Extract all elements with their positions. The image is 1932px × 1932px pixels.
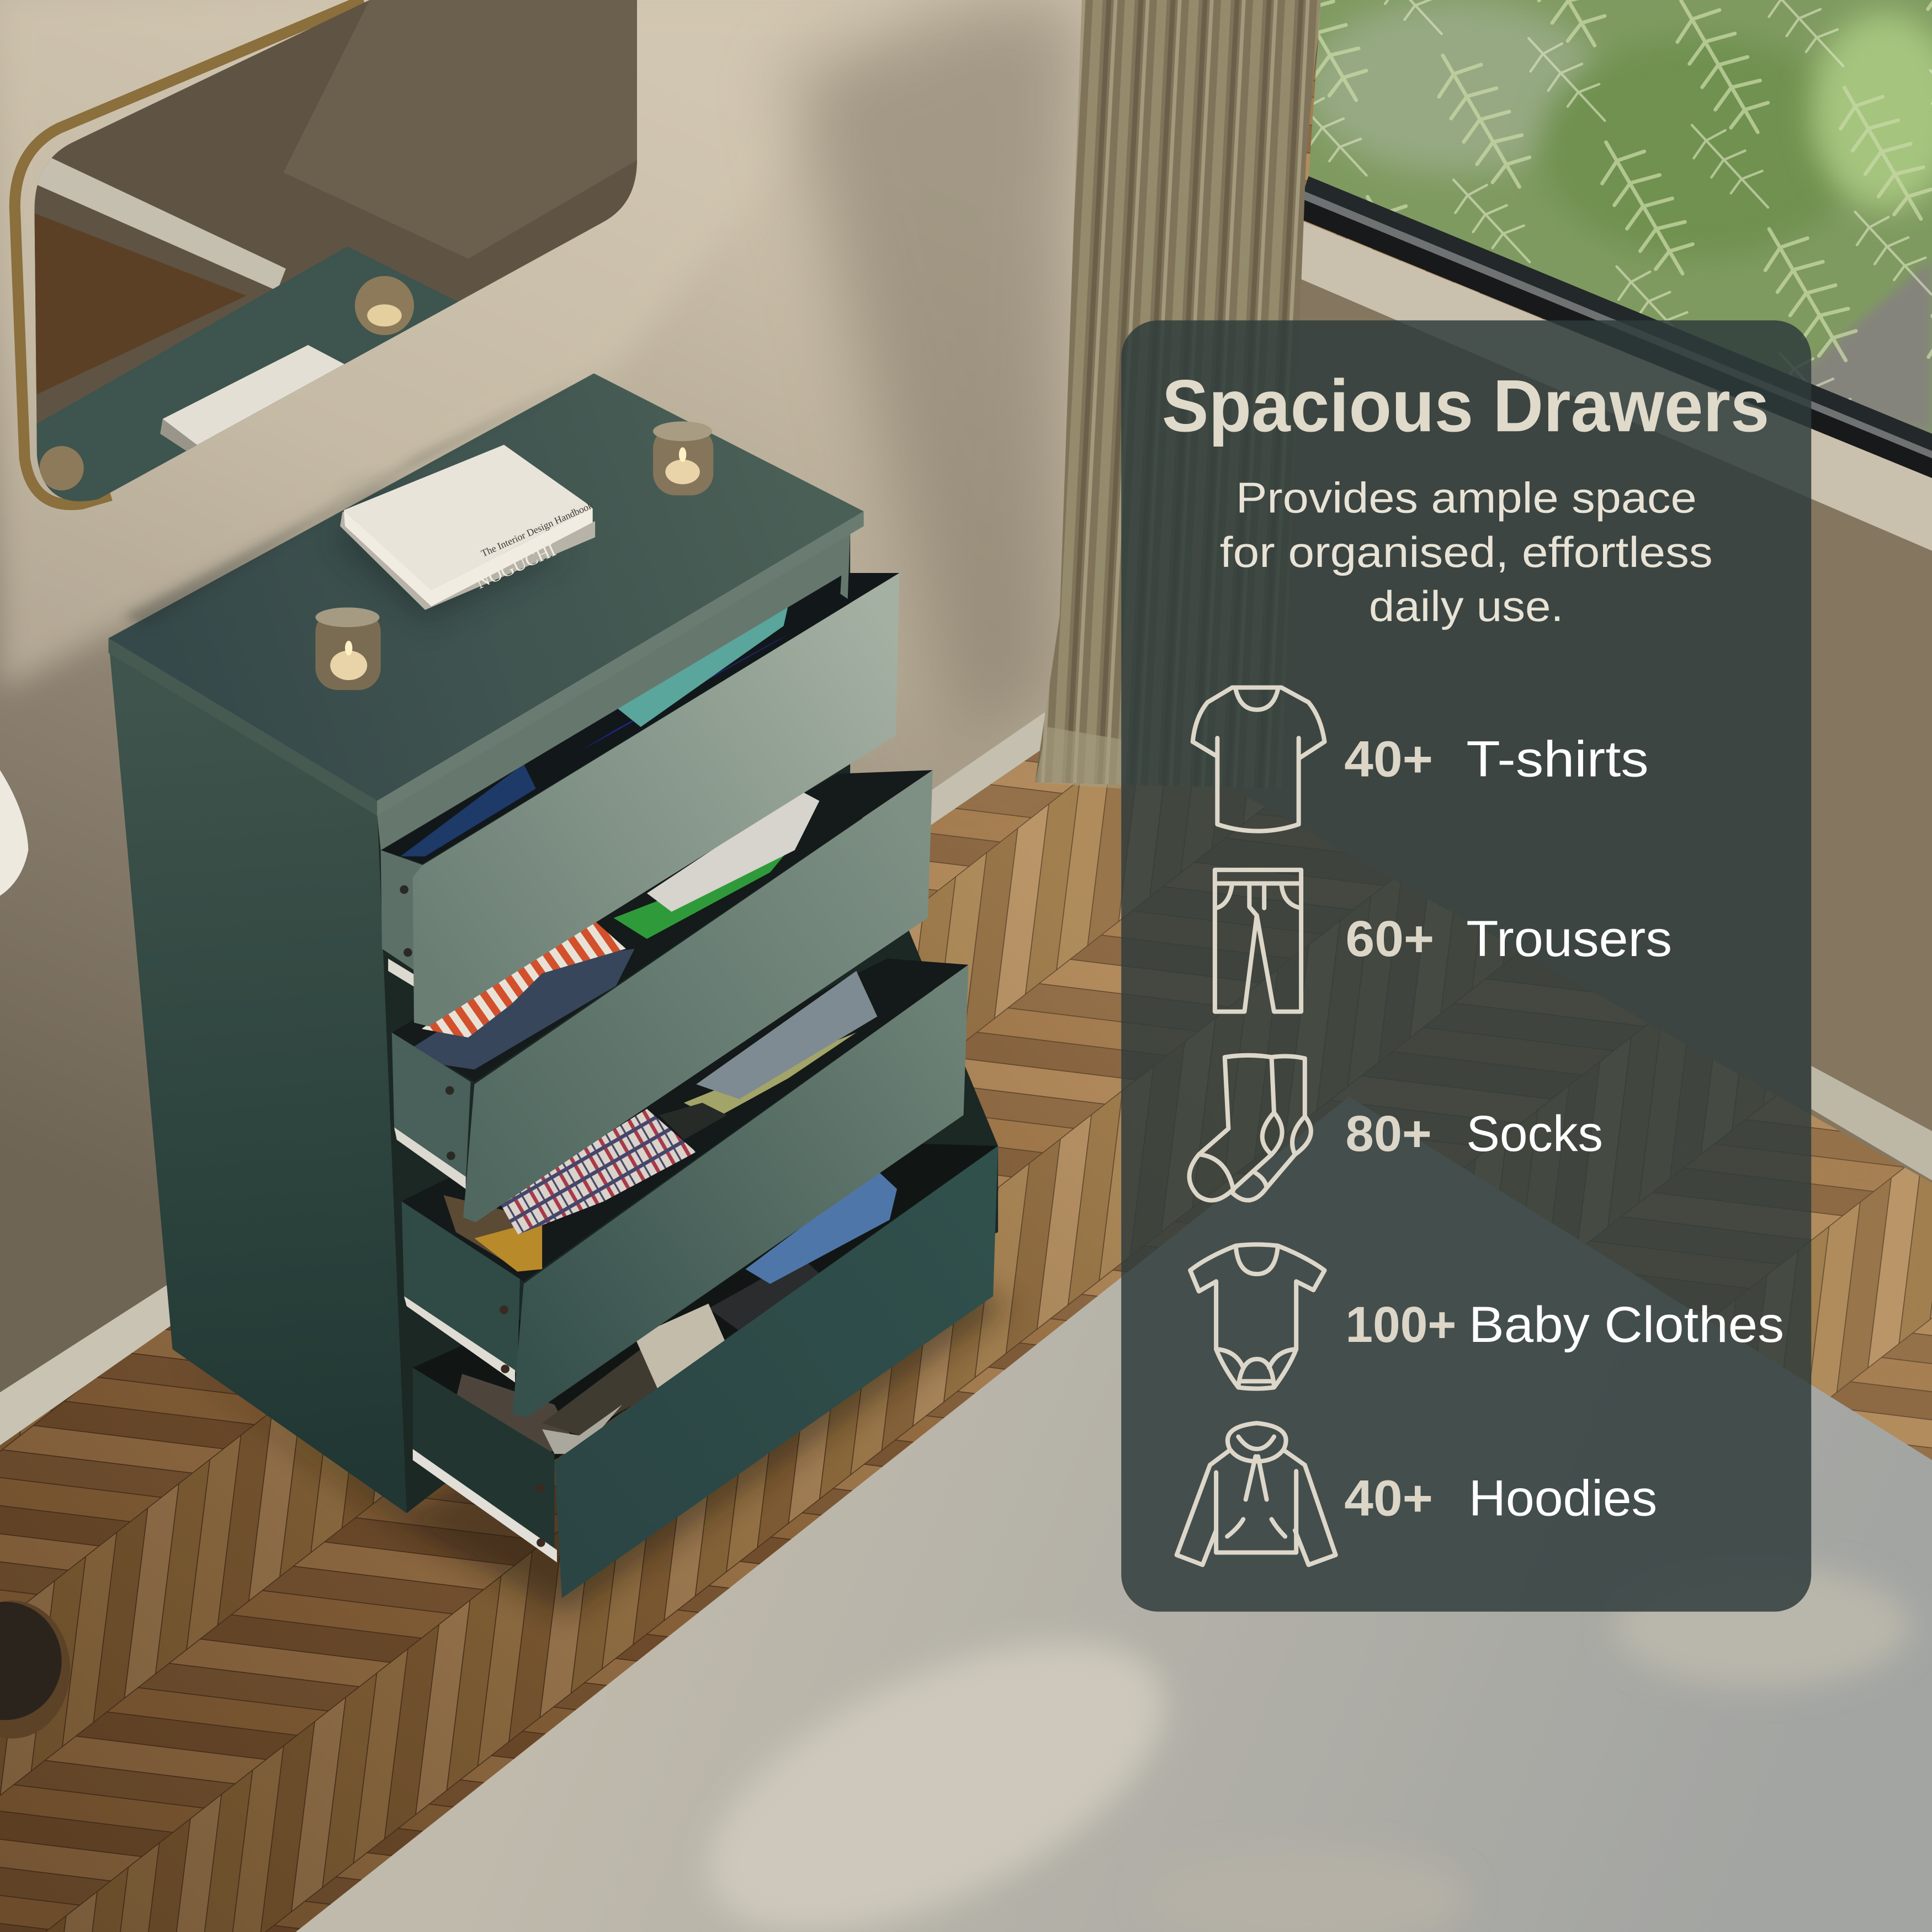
bottom drawer interior (413, 1143, 998, 1460)
bottom drawer side (413, 1368, 554, 1559)
count: 40+: 40+ (1344, 731, 1433, 787)
second drawer interior (392, 770, 933, 1082)
second drawer (392, 770, 933, 1222)
book title: Noguchi: NOGUCHI (473, 540, 559, 593)
chest top surface (108, 373, 864, 801)
label: T-shirts: T-shirts (1466, 731, 1649, 787)
window with foliage (1301, 0, 1932, 478)
chest of drawers (108, 373, 998, 1598)
row: socks (1190, 1055, 1603, 1200)
upper book (344, 445, 593, 590)
top drawer clothes (400, 604, 789, 856)
chest side panel (108, 638, 407, 1513)
icon: trousers (1215, 870, 1301, 1012)
book shadow (333, 493, 567, 622)
label: Baby Clothes: Baby Clothes (1469, 1297, 1784, 1353)
third drawer slide (404, 1296, 515, 1382)
upper book spine (344, 508, 593, 606)
row: baby clothes (1190, 1244, 1784, 1389)
candle left (315, 607, 381, 690)
icon: t-shirt (1193, 688, 1325, 831)
rug (296, 1097, 1932, 1932)
label: Socks: Socks (1466, 1106, 1603, 1162)
count: 100+: 100+ (1346, 1297, 1456, 1353)
title: Spacious Drawers (1162, 365, 1769, 447)
book title: Handbook: The Interior Design Handbook (479, 500, 595, 559)
second drawer clothes (413, 791, 819, 1070)
bottom drawer clothes (456, 1171, 897, 1454)
baseboards (0, 712, 1047, 1445)
wall shadow on top (123, 380, 579, 628)
chest shadow on floor (172, 1232, 1010, 1614)
chest top front edge (377, 511, 864, 816)
row: hoodies (1177, 1423, 1657, 1565)
bottom drawer front (554, 1146, 998, 1598)
label: Hoodies: Hoodies (1469, 1471, 1657, 1527)
window sill and right wall (1232, 219, 1932, 1183)
description: Provides ample space (1236, 474, 1697, 522)
top drawer side (381, 850, 423, 973)
count: 60+: 60+ (1346, 911, 1434, 967)
third drawer interior (402, 959, 968, 1281)
chest top left edge (108, 638, 377, 816)
wall (0, 0, 1109, 1392)
top drawer (381, 573, 899, 1026)
second drawer side (392, 1033, 471, 1183)
icon: hoodie (1177, 1423, 1336, 1565)
bottom drawer (413, 1143, 998, 1598)
icon: baby bodysuit (1190, 1244, 1325, 1389)
count: 80+: 80+ (1346, 1106, 1432, 1162)
icon: socks (1190, 1055, 1311, 1200)
count: 40+: 40+ (1344, 1471, 1433, 1527)
third drawer (402, 959, 968, 1417)
top drawer interior (382, 573, 899, 864)
description: for organised, effortless (1220, 528, 1713, 576)
label: Trousers: Trousers (1466, 911, 1672, 967)
lower book (340, 511, 595, 610)
description: daily use. (1369, 582, 1564, 630)
row: trousers (1215, 870, 1672, 1012)
third drawer front (513, 965, 968, 1417)
chest dark carcass front (377, 530, 998, 1513)
third drawer side (402, 1201, 520, 1374)
chest frame band under top (377, 527, 850, 850)
floor lamp base (0, 1601, 70, 1739)
mirror (0, 0, 641, 518)
curtain (1035, 0, 1321, 789)
row: t-shirts (1193, 688, 1649, 831)
top drawer front (413, 573, 899, 1026)
chest right frame edge (840, 530, 850, 599)
description (1220, 474, 1713, 630)
lamp shade at left edge (0, 770, 28, 896)
top drawer slide (388, 959, 416, 988)
bottom drawer slide (413, 1449, 557, 1562)
stacked books (340, 445, 595, 610)
info panel (1121, 320, 1811, 1612)
second drawer slide (394, 1127, 466, 1189)
third drawer clothes (444, 971, 877, 1272)
second drawer front (463, 770, 933, 1222)
candle right (653, 421, 713, 495)
